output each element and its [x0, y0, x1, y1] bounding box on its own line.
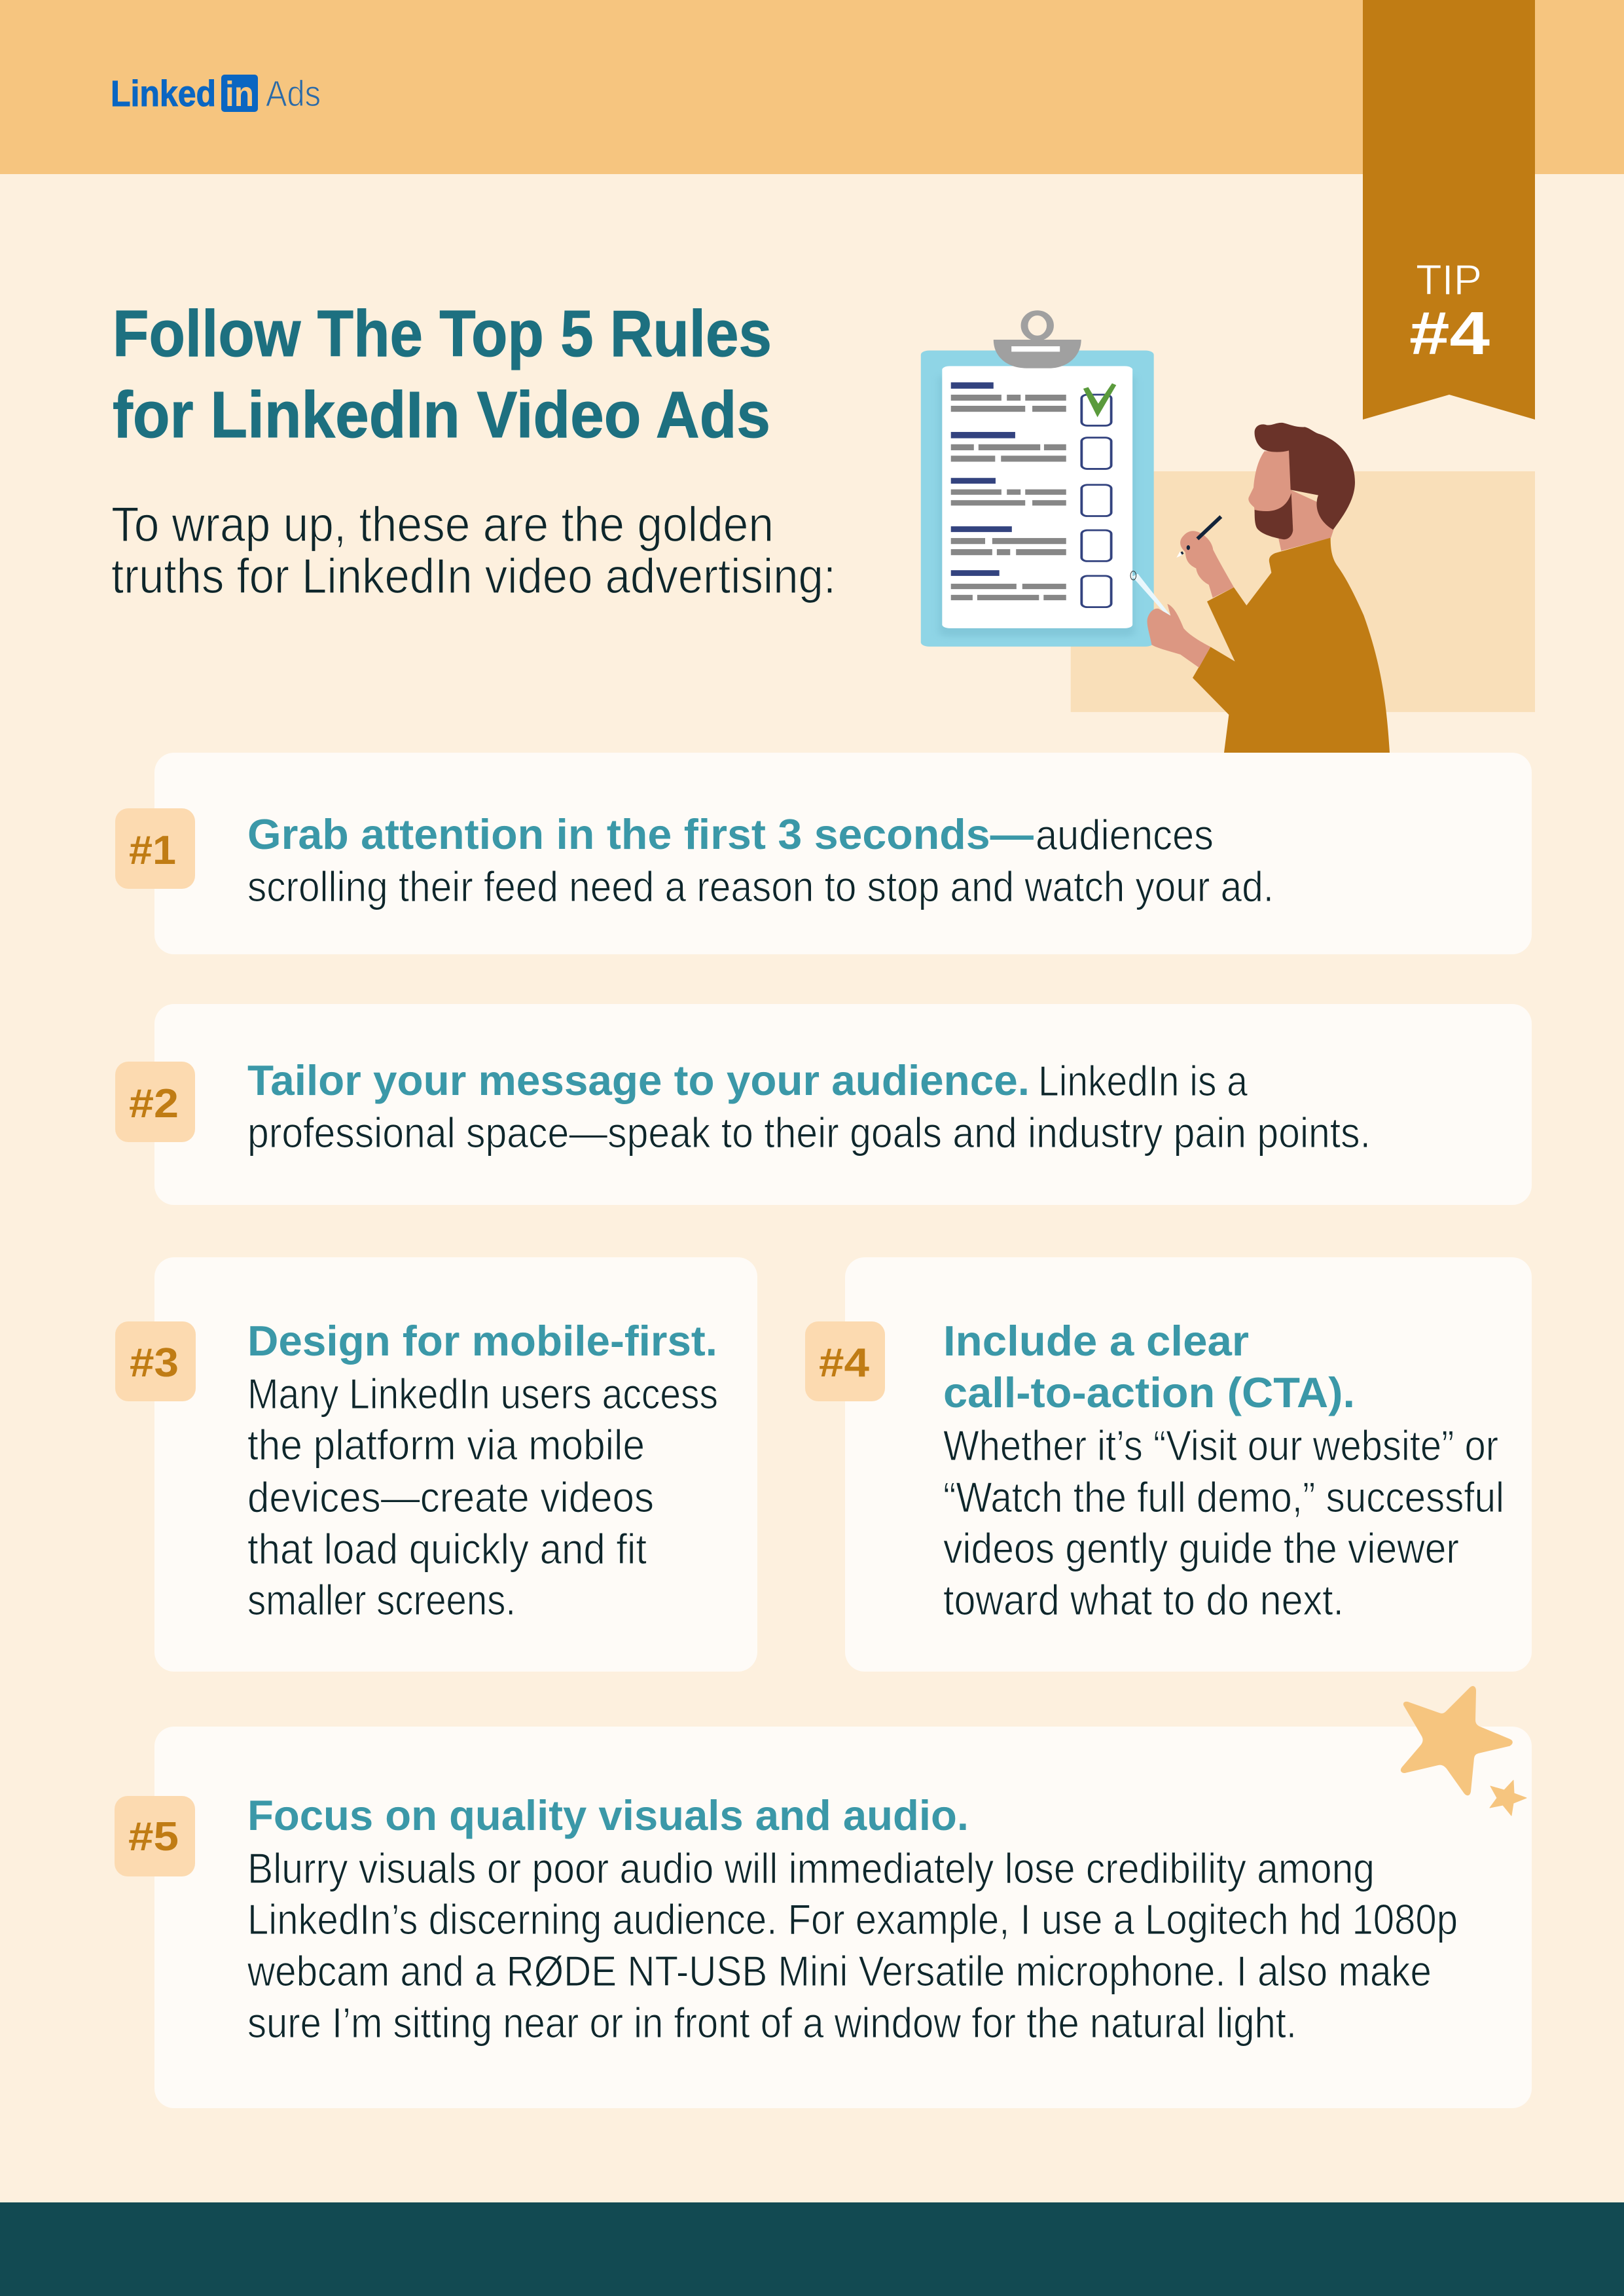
ribbon: tip 4: TIP: [1416, 256, 1482, 304]
intro text: To wrap up, these are the golden: [111, 497, 774, 552]
peach backdrop: [1071, 471, 1535, 712]
rule 3 text: that load quickly and fit: [247, 1525, 647, 1573]
badge 5: [115, 1796, 195, 1876]
panel: rule 4: [805, 1257, 1532, 1672]
rule 5 text: Focus on quality visuals and audio.: [247, 1791, 969, 1839]
badge 1: #1: [129, 828, 176, 873]
sweater: [1193, 538, 1390, 753]
panel: rule 1: [115, 753, 1532, 954]
rule 5 text: sure I’m sitting near or in front of a window for the natural light.: [247, 1999, 1297, 2047]
ribbon: tip 4: [1363, 0, 1535, 420]
rule 2 text: professional space—speak to their goals and industry pain points.: [247, 1109, 1371, 1157]
rule 4 text: Include a clear: [943, 1317, 1249, 1365]
rule 3 text: Design for mobile-first.: [247, 1317, 717, 1365]
pen in raised hand: [1176, 516, 1221, 558]
rule 1 text: scrolling their feed need a reason to stop and watch your ad.: [247, 863, 1274, 910]
intro text: [111, 497, 836, 603]
rule 3 text: [247, 1317, 718, 1624]
panel: rule 3: [115, 1257, 757, 1672]
rule 4 text: videos gently guide the viewer: [943, 1524, 1459, 1572]
illustration: backdrop and checklist: [921, 313, 1535, 712]
lower hand: [1147, 604, 1210, 668]
rule 2 text: [247, 1056, 1371, 1157]
neck and face: [1278, 490, 1333, 551]
LinkedIn Ads logo: Ads: [266, 73, 321, 114]
header band: [0, 0, 1624, 174]
rule 1 text: [247, 810, 1274, 910]
rule 1 text: Grab attention in the first 3 seconds—: [247, 810, 1034, 858]
rule 4 text: “Watch the full demo,” successful: [943, 1473, 1504, 1521]
rule 5 text: LinkedIn’s discerning audience. For example, I use a Logitech hd 1080p: [247, 1895, 1458, 1943]
clipboard: [921, 313, 1154, 647]
rule 3 text: smaller screens.: [247, 1576, 516, 1624]
rule 5 text: [247, 1791, 1458, 2047]
badge 1: [115, 808, 195, 889]
badge 2: #2: [129, 1081, 179, 1126]
panel: rule 5: [115, 1727, 1532, 2108]
badge 4: #4: [819, 1340, 870, 1386]
rule 4 text: call-to-action (CTA).: [943, 1369, 1355, 1416]
raised hand: [1180, 531, 1234, 598]
rule 4 text: Whether it’s “Visit our website” or: [943, 1422, 1498, 1469]
icon: stars: [1403, 1688, 1526, 1816]
rule 3 text: the platform via mobile: [247, 1421, 645, 1469]
badge 4: [805, 1321, 885, 1401]
rule 3 text: devices—create videos: [247, 1473, 654, 1521]
beard: [1255, 493, 1293, 539]
intro text: truths for LinkedIn video advertising:: [111, 548, 836, 603]
LinkedIn Ads logo: [111, 73, 321, 114]
hair: [1255, 423, 1355, 529]
ribbon: tip 4: #4: [1409, 299, 1490, 367]
LinkedIn Ads logo: Linked: [111, 73, 216, 114]
rule 4 text: toward what to do next.: [943, 1576, 1344, 1624]
LinkedIn Ads logo: in: [225, 75, 254, 114]
rule 5 text: Blurry visuals or poor audio will immediately lose credibility among: [247, 1844, 1375, 1892]
badge 2: [115, 1062, 195, 1142]
illustration: person writing: [1130, 423, 1390, 753]
badge 3: [115, 1321, 196, 1401]
rule 5 text: webcam and a RØDE NT-USB Mini Versatile microphone. I also make: [247, 1947, 1432, 1995]
title: for LinkedIn Video Ads: [113, 378, 770, 452]
title: Follow The Top 5 Rules: [113, 297, 772, 370]
rule 2 text: Tailor your message to your audience.: [247, 1056, 1030, 1104]
badge 5: #5: [128, 1814, 179, 1859]
footer band: [0, 2202, 1624, 2296]
rule 3 text: Many LinkedIn users access: [247, 1370, 718, 1418]
badge 3: #3: [130, 1340, 179, 1386]
panel: rule 2: [115, 1004, 1532, 1205]
title: [113, 297, 772, 452]
white stylus: [1130, 571, 1171, 617]
rule 2 text: LinkedIn is a: [1038, 1057, 1248, 1105]
rule 4 text: [943, 1317, 1504, 1624]
rule 1 text: audiences: [1036, 811, 1214, 859]
